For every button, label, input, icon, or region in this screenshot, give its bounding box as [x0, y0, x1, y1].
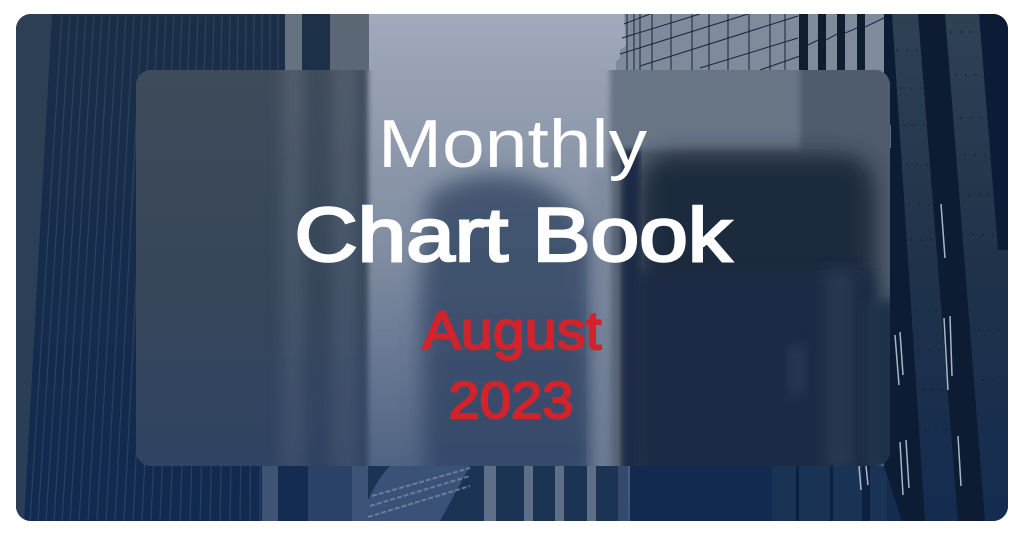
right dark tower with panels — [630, 14, 1008, 521]
frosted glass panel — [136, 70, 890, 466]
right upper glass tower — [616, 14, 888, 74]
lower centre round tower — [368, 460, 628, 521]
date: 2023: 2023 — [448, 372, 574, 430]
left tower with vertical fins — [16, 14, 288, 521]
blurred reflections — [280, 70, 890, 466]
title: Chart Book: Chart Book — [294, 193, 733, 278]
title: Monthly: Monthly — [378, 106, 647, 182]
left tower piers — [262, 14, 370, 521]
date: August: August — [422, 301, 602, 361]
